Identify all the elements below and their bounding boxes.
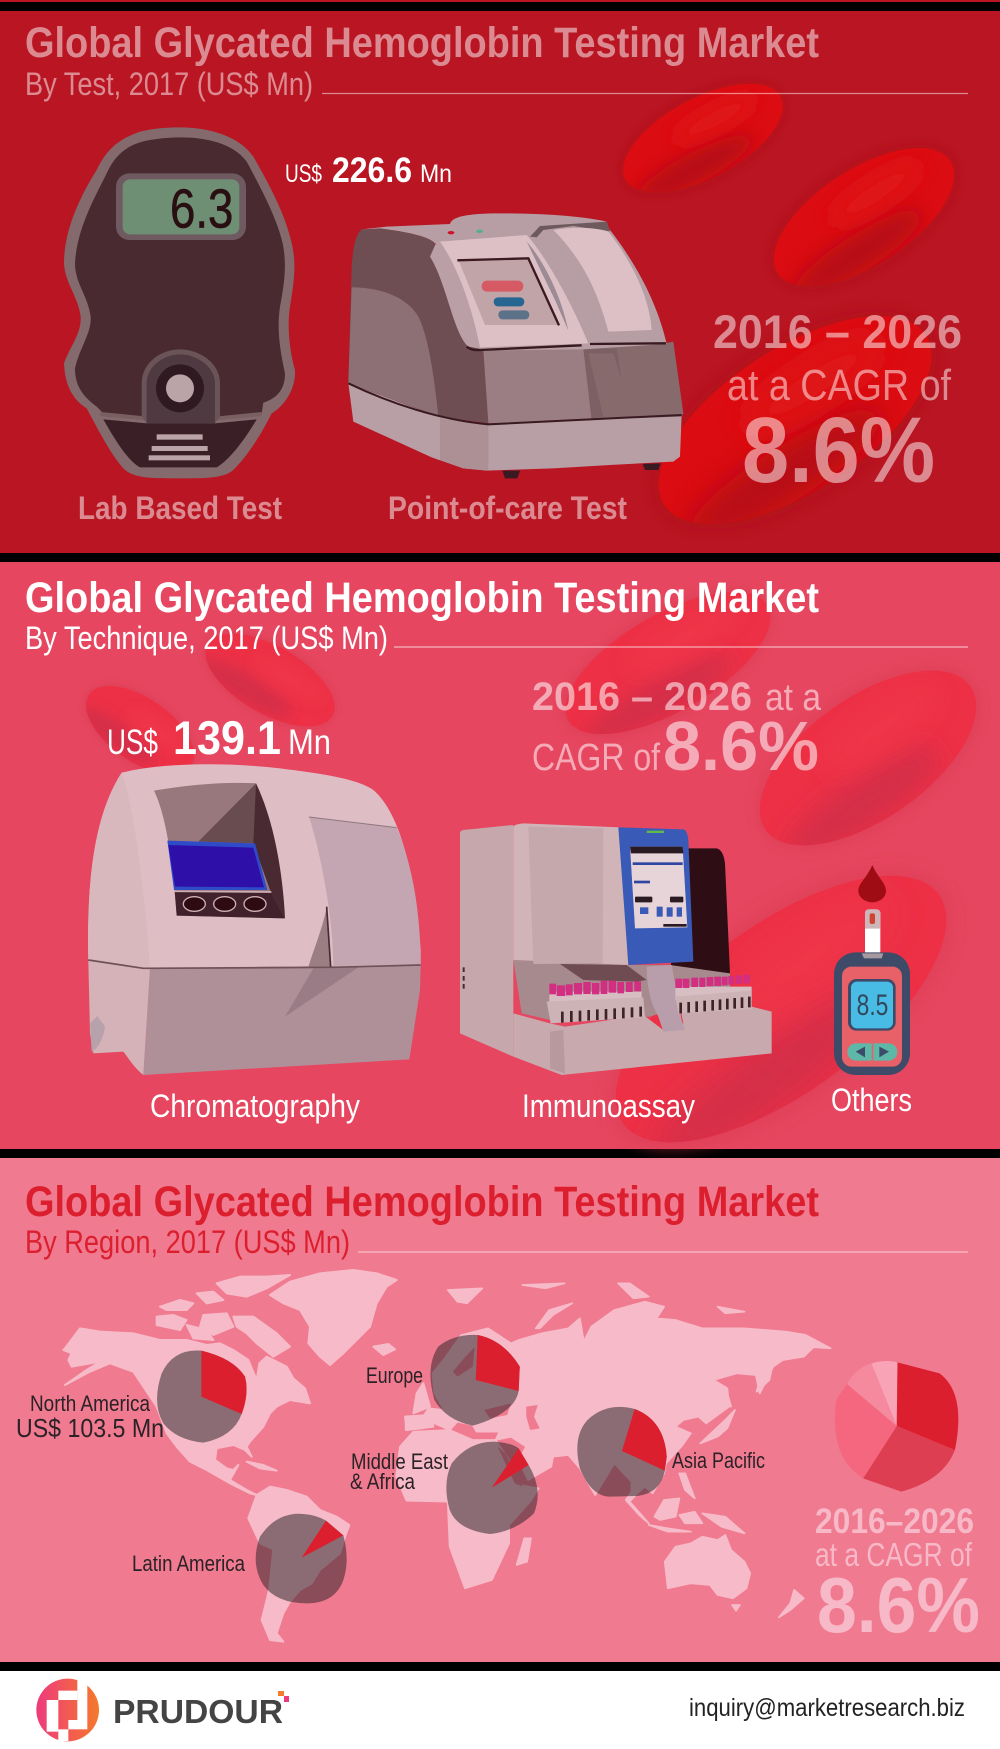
blood cell: bottom <box>619 268 971 572</box>
region labels: Latin America <box>132 1551 246 1576</box>
region labels: US$ 103.5 Mn <box>16 1413 164 1443</box>
icon: point-of-care analyzer <box>348 213 683 478</box>
value: 139.1 <box>107 711 331 764</box>
blood cell: top <box>603 58 803 218</box>
icon: lab based test device <box>64 127 295 478</box>
CAGR callout <box>713 305 962 502</box>
pie: north america <box>157 1350 247 1443</box>
blood cell: left <box>68 666 212 794</box>
label: chromatography: Chromatography <box>150 1088 360 1124</box>
contact email: inquiry@marketresearch.biz <box>689 1694 965 1722</box>
value: 226.6: 226.6 <box>332 151 412 190</box>
blood cell: bottom <box>566 818 996 1200</box>
CAGR callout: at a <box>765 677 822 719</box>
CAGR callout: 2016–2026 <box>815 1502 974 1541</box>
CAGR callout: 8.6% <box>742 398 935 502</box>
blood cell: right <box>725 631 1000 885</box>
subtitle: By Region, 2017 (US$ Mn) <box>25 1224 350 1260</box>
pie: global share <box>835 1361 958 1492</box>
CAGR callout <box>815 1502 980 1649</box>
panel: by technique <box>0 559 1000 1200</box>
CAGR callout: 8.6% <box>817 1561 980 1649</box>
region labels: Asia Pacific <box>672 1448 765 1473</box>
pie: latin america <box>256 1514 347 1603</box>
value: 139.1: Mn <box>288 723 331 762</box>
label: lab based test: Lab Based Test <box>78 490 282 526</box>
blood cell: middle <box>747 116 981 318</box>
value: 226.6: Mn <box>420 160 452 188</box>
icon: glucose meter and blood drop: 8.5 <box>857 989 888 1022</box>
blood cell: upper left <box>188 612 352 748</box>
panel: by test <box>0 0 1000 572</box>
logo mark <box>36 1679 99 1741</box>
value: 139.1: 139.1 <box>173 711 281 764</box>
icon: chromatography analyzer <box>88 764 421 1075</box>
icon: immunoassay analyzer <box>460 823 772 1075</box>
value: 226.6: US$ <box>285 160 322 188</box>
region labels: Middle East <box>351 1449 448 1474</box>
region labels: & Africa <box>350 1469 416 1494</box>
title: Global Glycated Hemoglobin Testing Market <box>25 1178 819 1226</box>
CAGR callout <box>532 675 822 785</box>
region labels <box>16 1363 765 1576</box>
pie: europe <box>430 1335 520 1426</box>
icon: glucose meter and blood drop <box>834 865 910 1075</box>
subtitle: By Technique, 2017 (US$ Mn) <box>25 620 388 656</box>
CAGR callout: 2016 – 2026 <box>532 675 752 719</box>
pie: asia pacific <box>577 1407 667 1497</box>
CAGR callout: CAGR of <box>532 737 660 779</box>
logo accent squares <box>278 1691 289 1702</box>
footer <box>0 1671 1000 1749</box>
label: point-of-care test: Point-of-care Test <box>388 490 627 526</box>
CAGR callout: 2016 – 2026 <box>713 305 962 358</box>
region labels: Europe <box>366 1363 423 1388</box>
subtitle: By Test, 2017 (US$ Mn) <box>25 66 313 102</box>
world map: americas <box>63 1270 433 1642</box>
icon: lab based test device: 6.3 <box>170 177 233 239</box>
region labels: North America <box>30 1391 151 1416</box>
pie: middle east and africa <box>446 1442 538 1534</box>
world map: eastern hemisphere <box>396 1283 831 1617</box>
CAGR callout: at a CAGR of <box>727 361 952 410</box>
panel: by region <box>0 1158 1000 1662</box>
logo wordmark: PRUDOUR <box>113 1693 283 1730</box>
title: Global Glycated Hemoglobin Testing Market <box>25 19 819 67</box>
title: Global Glycated Hemoglobin Testing Market <box>25 574 819 622</box>
blood cell: upper centre <box>540 559 796 767</box>
value: 139.1: US$ <box>107 723 158 762</box>
label: immunoassay: Immunoassay <box>522 1088 695 1124</box>
CAGR callout: 8.6% <box>663 707 819 785</box>
label: others: Others <box>831 1082 912 1118</box>
value: 226.6 <box>285 151 452 190</box>
